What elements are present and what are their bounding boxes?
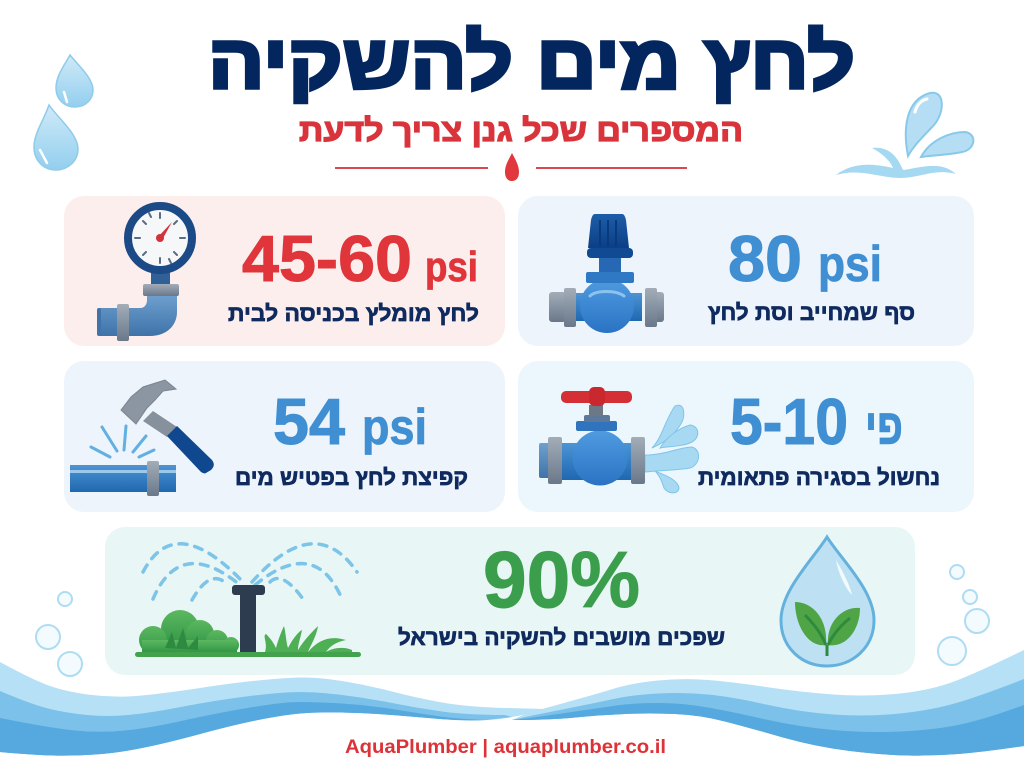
panel: water hammer <box>64 361 505 512</box>
stat: 5-10 times: פי <box>865 399 903 455</box>
icon: pressure reducing valve <box>549 214 664 333</box>
label: recommended pressure: לחץ מומלץ בכניסה לבית <box>228 301 479 326</box>
label: moshav effluent for irrigation: שפכים מושבים להשקיה בישראל <box>398 625 725 650</box>
stat: 80 psi: psi <box>818 236 882 292</box>
icon: water splash, top right <box>836 93 973 178</box>
subtitle: המספרים שכל גנן צריך לדעת <box>299 113 743 148</box>
title: לחץ מים להשקיה <box>208 20 855 105</box>
label: surge on sudden closing: נחשול בסגירה פתאומית <box>698 465 940 490</box>
stat: 80 psi <box>728 222 882 295</box>
footer brand: AquaPlumber | aquaplumber.co.il <box>345 737 666 758</box>
icon: hammer striking pipe <box>70 380 214 496</box>
icon: valve with water spray <box>539 387 699 493</box>
decorative bubbles, right <box>938 565 989 665</box>
divider with red drop <box>335 153 687 181</box>
stat: 5-10 times: 5-10 <box>730 385 848 458</box>
panel: 80 psi threshold <box>518 196 974 346</box>
stat: 54 psi: psi <box>362 399 427 455</box>
decorative bubbles, left <box>36 592 82 676</box>
icon: falling water drops, top left <box>34 55 93 170</box>
panel: recommended pressure <box>64 196 505 346</box>
stat: 45-60 psi: psi <box>425 243 478 290</box>
label: threshold requiring regulator: סף שמחייב וסת לחץ <box>708 300 915 325</box>
icon: pressure gauge on elbow pipe <box>97 206 192 341</box>
icon: water drop with plant <box>781 537 874 666</box>
stat: 54 psi <box>273 385 427 458</box>
panel: moshav effluent irrigation <box>105 527 915 675</box>
label: water hammer pressure jump: קפיצת לחץ בפטיש מים <box>235 465 468 490</box>
waves <box>0 650 1024 756</box>
stat: 54 psi: 54 <box>273 385 345 458</box>
stat: 45-60 psi: 45-60 <box>242 222 412 295</box>
panel: surge on sudden closing <box>518 361 974 512</box>
stat: 90%: 90% <box>483 535 640 624</box>
stat: 80 psi: 80 <box>728 222 802 295</box>
icon: garden sprinkler <box>135 544 361 657</box>
